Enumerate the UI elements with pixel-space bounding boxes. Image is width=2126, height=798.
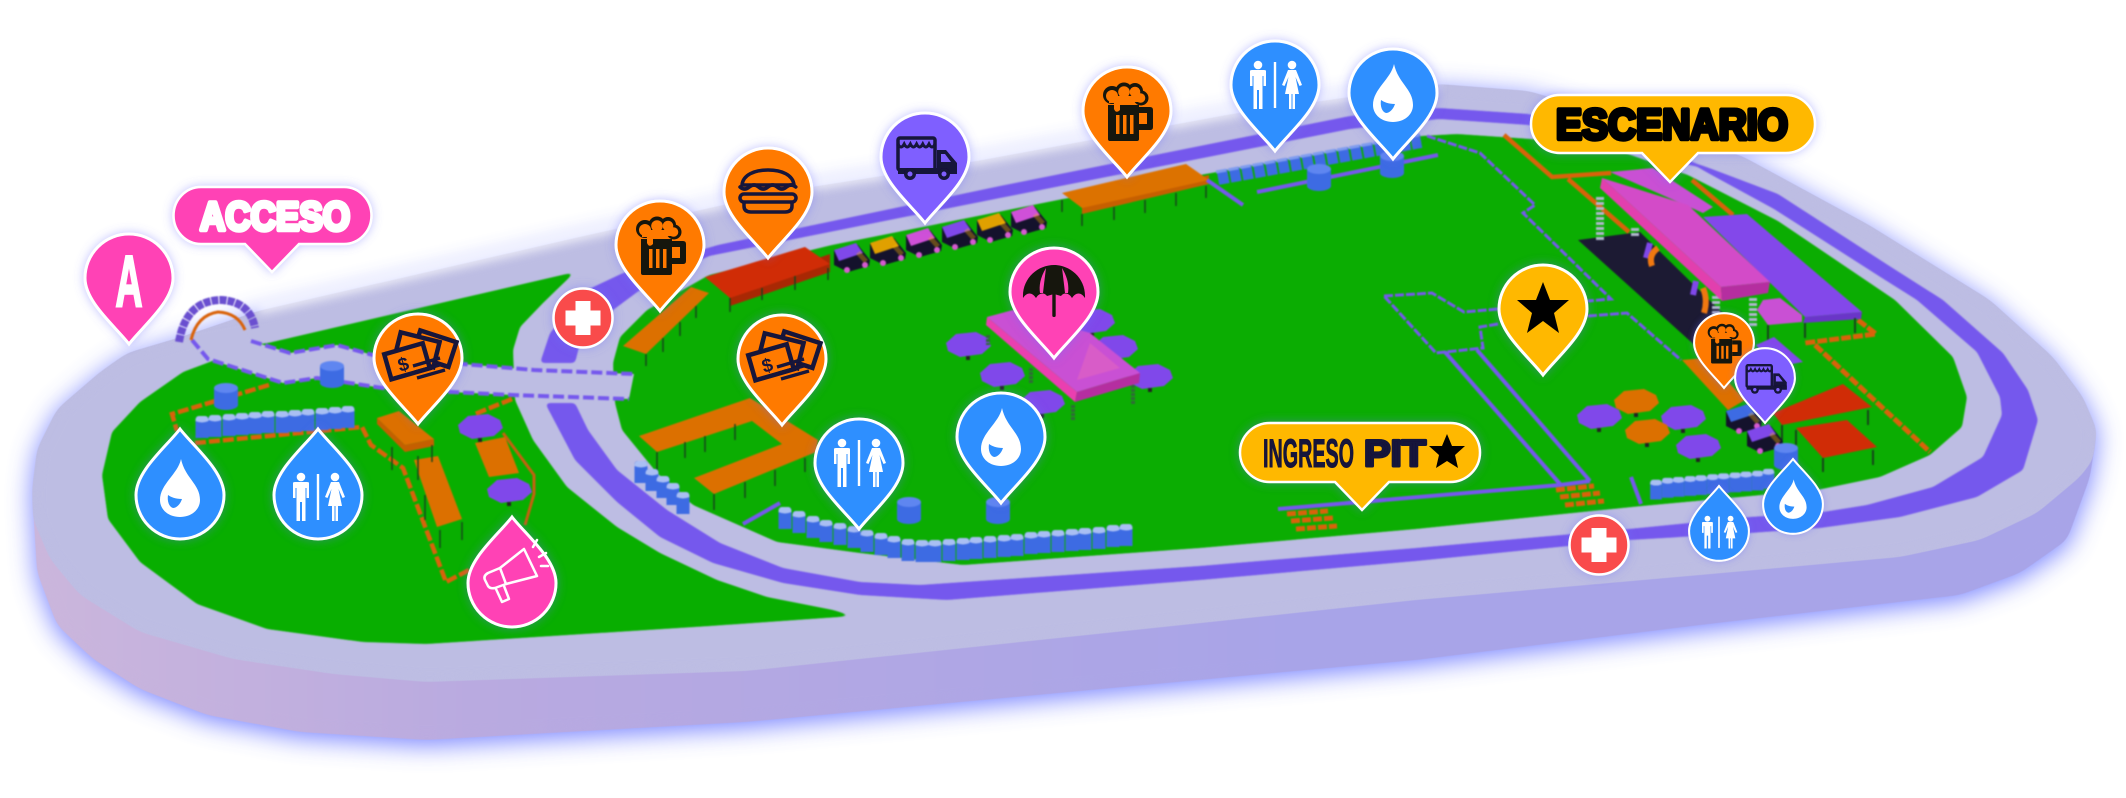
umbrellas, left: [458, 414, 532, 506]
pink tent: [986, 310, 1140, 420]
pin: water, centre: [957, 393, 1045, 503]
water tanks, centre: [897, 497, 1010, 524]
toilets and tank, stage side: [1650, 443, 1798, 500]
water tanks, back: [1307, 151, 1404, 191]
stage arches: [1646, 243, 1706, 313]
orange and red tents, stage side: [1682, 337, 1877, 472]
pin: restrooms, back: [1231, 41, 1319, 151]
vendor tents, left: [377, 411, 519, 548]
road dashed edges: [192, 340, 634, 399]
purple track band: [540, 108, 2038, 600]
entrance arch: [179, 300, 255, 342]
pin: beer 2: [1083, 67, 1171, 177]
pit solid barriers: [1278, 350, 1590, 509]
pit dashed barriers: [1384, 136, 1681, 360]
callout: ESCENARIO: ESCENARIO: [1556, 101, 1788, 149]
soft white haze on the back edge: [258, 82, 1439, 309]
callout: ACCESO: [174, 187, 371, 272]
pin: cashier, centre: [738, 315, 826, 425]
stage floor: [1578, 232, 1745, 350]
lounge umbrellas around pink tent: [946, 309, 1173, 418]
toilets, left diagonal: [634, 461, 690, 514]
orange fences, stage: [1504, 135, 1733, 232]
left lawn: [102, 272, 853, 644]
toilets, back row: [1216, 135, 1421, 178]
pin: beer 1: [616, 201, 704, 311]
food carts: [834, 205, 1047, 273]
small pink tent: [1757, 298, 1802, 325]
track surface: [32, 84, 2097, 682]
pin: food truck, small: [1735, 348, 1795, 423]
stage roof: [1600, 168, 1770, 301]
pin: A: A: [116, 242, 142, 322]
umbrellas, stage side: [1577, 389, 1721, 462]
pin: umbrella: [1010, 248, 1098, 358]
callout: INGRESO PIT: PIT: [1364, 433, 1426, 474]
brick stacks: [1287, 486, 1604, 529]
callout: ACCESO: ACCESO: [200, 195, 350, 239]
callout: INGRESO PIT: [1240, 423, 1480, 510]
callout: ESCENARIO: [1531, 95, 1815, 182]
pin: food truck: [881, 113, 969, 223]
platform side wall: [32, 400, 2097, 740]
marker: first aid, right: [1570, 516, 1628, 574]
pin: A: [85, 234, 173, 344]
orange fences, left area: [172, 385, 512, 582]
purple barrier lines: [743, 155, 1641, 524]
purple rear tent: [1703, 214, 1862, 340]
pin: star: [1499, 265, 1587, 375]
pin: restrooms, left: [274, 429, 362, 539]
access road: [190, 325, 634, 399]
pin: restrooms, small: [1689, 486, 1749, 561]
pin: water, back: [1349, 49, 1437, 159]
carts, stage side: [1726, 404, 1783, 454]
pin: restrooms, centre: [815, 419, 903, 529]
callout: INGRESO PIT: INGRESO: [1263, 432, 1354, 476]
tents, main lawn: [623, 164, 1209, 510]
truss pillars: [1600, 197, 1753, 328]
main lawn: [613, 134, 1967, 565]
pin: water, left: [136, 429, 224, 539]
pin: water, small: [1763, 459, 1823, 534]
pin: beer, small: [1694, 313, 1754, 388]
water tanks, left: [214, 361, 344, 410]
marker: first aid, left: [554, 288, 612, 348]
pin: burger: [724, 148, 812, 258]
pin: cashier, left: [374, 314, 462, 424]
toilets row, left: [196, 406, 354, 438]
pin: megaphone: [468, 517, 556, 627]
toilets, long row: [778, 507, 1132, 562]
platform glow: [32, 89, 2097, 745]
